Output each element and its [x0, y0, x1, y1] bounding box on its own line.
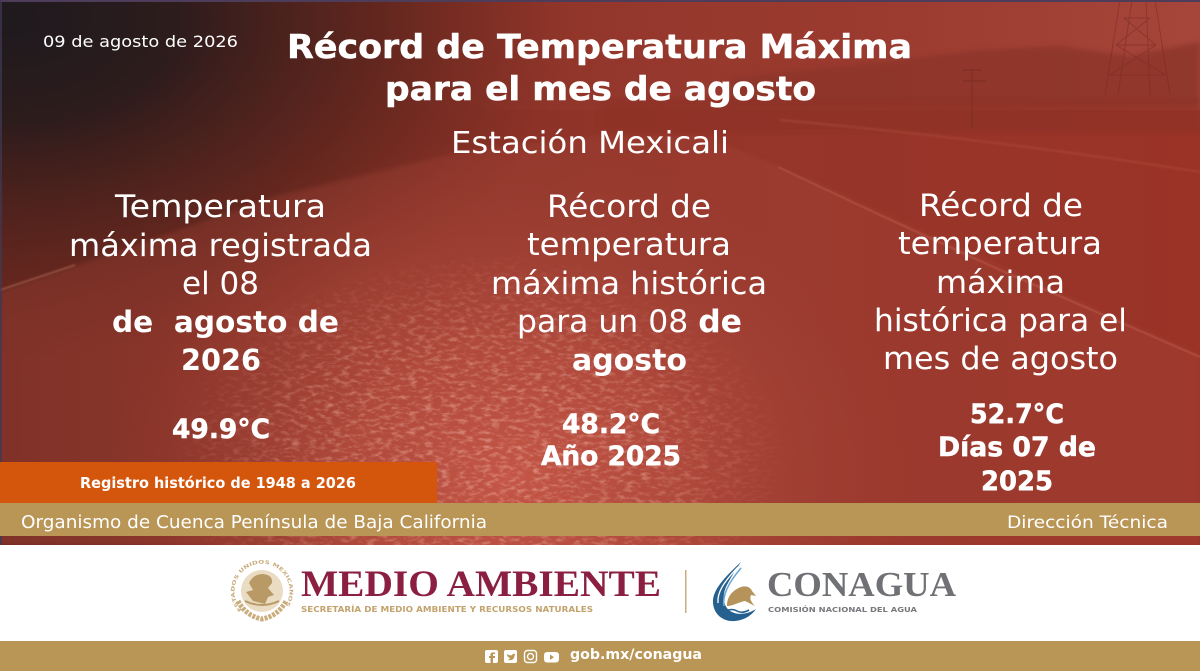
- column 2: daily record: agosto: [572, 343, 687, 377]
- column 2: daily record: temperatura: [527, 227, 731, 263]
- title: Récord de Temperatura Máxima: [287, 27, 912, 66]
- value: 48.2°C Año 2025: 48.2°C: [562, 409, 660, 440]
- subtitle: station: Estación Mexicali: [451, 126, 729, 161]
- column 1: recorded temperature: Temperatura: [114, 189, 326, 225]
- icon: instagram: [524, 650, 536, 662]
- icon: facebook: [485, 650, 498, 663]
- date: 09 de agosto de 2026: [43, 32, 238, 51]
- icon: twitter: [504, 650, 517, 663]
- column 3: monthly record: [874, 188, 1127, 497]
- column 3: monthly record: mes de agosto: [883, 341, 1118, 377]
- column 2: daily record: máxima histórica: [491, 266, 767, 302]
- icon: national seal: ESTADOS UNIDOS MEXICANOS: [230, 560, 294, 612]
- band: organism and direction: [0, 503, 1200, 536]
- column 1: recorded temperature: máxima registrada: [69, 228, 372, 264]
- icon: transmission tower: [1105, 0, 1170, 95]
- link: gob.mx/conagua: gob.mx/conagua: [570, 647, 702, 663]
- value: 52.7°C Días 07 de 2025: Días 07 de: [938, 432, 1096, 463]
- column 1: recorded temperature: 2026: [181, 343, 261, 377]
- icon: utility pole: [962, 69, 986, 128]
- banner: historical record: [0, 462, 437, 503]
- column 3: monthly record: histórica para el: [874, 303, 1127, 339]
- value: 52.7°C Días 07 de 2025: 52.7°C: [970, 399, 1064, 430]
- logo: Conagua: CONAGUA: [767, 565, 957, 604]
- banner: historical record: Registro histórico de 1948 a 2026: [80, 474, 356, 492]
- value: 52.7°C Días 07 de 2025: [938, 399, 1096, 497]
- title: para el mes de agosto: [385, 69, 816, 108]
- logo: Conagua: COMISIÓN NACIONAL DEL AGUA: [768, 605, 918, 614]
- value: 52.7°C Días 07 de 2025: 2025: [981, 466, 1053, 497]
- column 1: recorded temperature: [69, 189, 372, 445]
- title: [287, 27, 912, 108]
- column 2: daily record: para un 08 de: [517, 304, 742, 340]
- logo: Medio Ambiente: [230, 560, 661, 622]
- footer band: [0, 641, 1200, 671]
- column 2: daily record: [491, 189, 767, 472]
- logo: Medio Ambiente: MEDIO AMBIENTE: [301, 564, 661, 605]
- logo: Conagua: [713, 562, 957, 621]
- column 1: recorded temperature: de agosto de: [112, 305, 339, 339]
- band: organism and direction: Dirección Técnica: [1007, 513, 1168, 532]
- column 3: monthly record: temperatura: [898, 226, 1102, 262]
- band: organism and direction: Organismo de Cuenca Península de Baja California: [21, 513, 487, 533]
- value: 49.9°C: 49.9°C: [172, 414, 270, 445]
- icon: water drop with bird: [713, 562, 756, 621]
- column 1: recorded temperature: el 08: [182, 266, 259, 302]
- column 3: monthly record: máxima: [936, 265, 1065, 301]
- column 2: daily record: Récord de: [547, 189, 711, 225]
- column 3: monthly record: Récord de: [919, 188, 1083, 224]
- white logo panel: [0, 545, 1200, 641]
- logo: Medio Ambiente: SECRETARÍA DE MEDIO AMBIENTE Y RECURSOS NATURALES: [301, 605, 593, 614]
- value: 48.2°C Año 2025: Año 2025: [541, 441, 681, 472]
- value: 48.2°C Año 2025: [541, 409, 681, 472]
- icon: youtube: [544, 652, 559, 662]
